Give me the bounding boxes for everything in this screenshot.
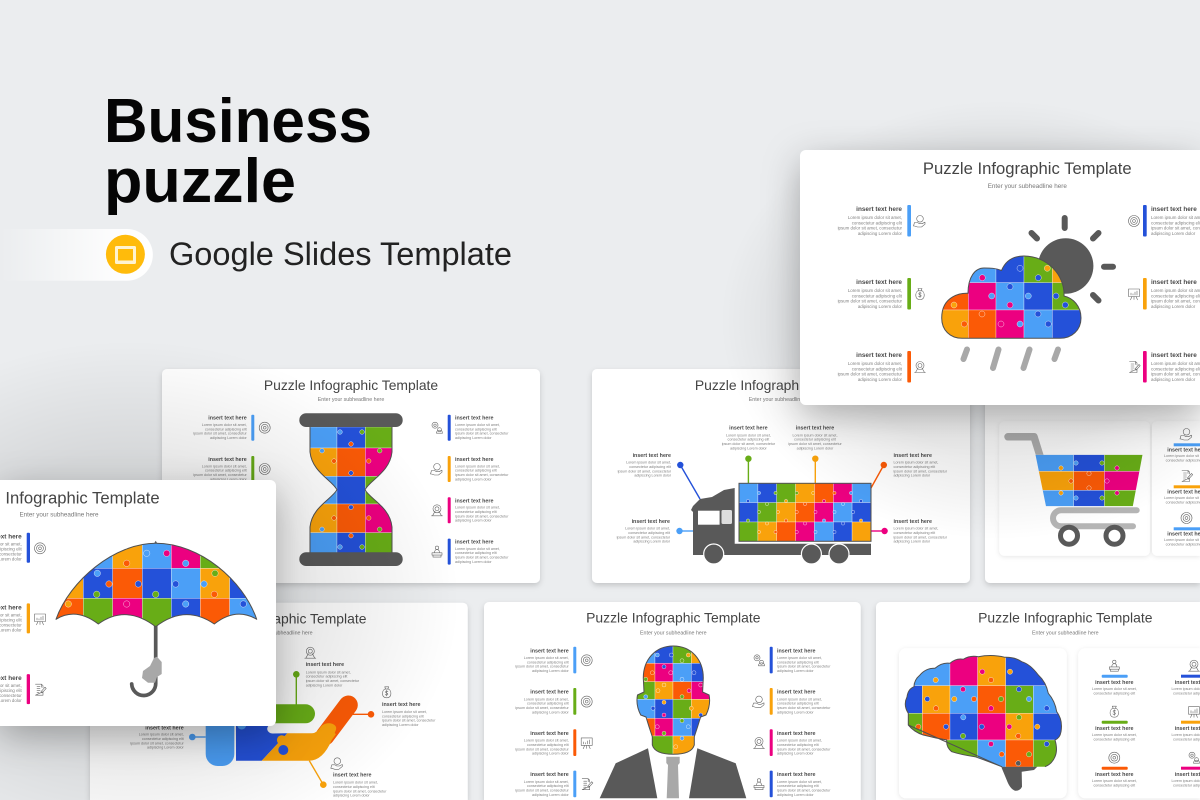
text block: hand top: Lorem ipsum dolor sit amet, bbox=[306, 670, 351, 674]
text block: head left 4: ipsum dolor sit amet, consectetur bbox=[515, 789, 569, 793]
icon: gear target bbox=[1128, 216, 1140, 226]
subheading: umbrella slide: Enter your subheadline here bbox=[19, 512, 99, 519]
text block: hand left: Lorem ipsum dolor sit amet, bbox=[139, 733, 184, 737]
text block: head left 1: consectetur adipiscing elit bbox=[527, 660, 569, 664]
text block: hand top: adipiscing Lorem dolor bbox=[306, 683, 343, 687]
connectors and dots bbox=[676, 456, 888, 534]
text block: cloud left 3: adipiscing Lorem dolor bbox=[858, 377, 903, 382]
text block: right 2: Lorem ipsum dolor sit amet, bbox=[455, 464, 500, 468]
list item: brain column 2 row 3 bbox=[1172, 752, 1200, 787]
list item: brain column 2 row 2 bbox=[1172, 707, 1200, 741]
text block: top centre 2: Lorem ipsum dolor sit amet, bbox=[793, 433, 837, 437]
icon: board bbox=[34, 614, 46, 625]
text block: right bottom: Lorem ipsum dolor sit amet, bbox=[894, 527, 938, 531]
text block: cloud right 3: adipiscing Lorem dolor bbox=[1151, 377, 1196, 382]
text block: cloud left 1: ipsum dolor sit amet, consectetur bbox=[838, 226, 903, 231]
icon: target bbox=[259, 422, 270, 433]
text block: left top: consectetur adipiscing elit bbox=[629, 465, 671, 469]
text block: cloud left 2: adipiscing Lorem dolor bbox=[858, 304, 903, 309]
text block: right bottom: consectetur adipiscing elit bbox=[894, 531, 935, 535]
text block: right 2: consectetur adipiscing elit bbox=[455, 469, 497, 473]
subheading: hand slide: Enter your subheadline here bbox=[246, 630, 313, 636]
subtitle: Google Slides Template bbox=[169, 236, 512, 272]
text block: left 1: adipiscing Lorem dolor bbox=[210, 436, 247, 440]
panel: hourglass slide bbox=[162, 369, 540, 583]
text block: right top: adipiscing Lorem dolor bbox=[894, 474, 931, 478]
text block: hand right bbox=[382, 687, 436, 727]
text block: umbrella left 2 bbox=[0, 603, 30, 633]
icon: document bbox=[582, 779, 593, 790]
text block: umbrella left 1 bbox=[0, 533, 30, 563]
text block: left 2: adipiscing Lorem dolor bbox=[210, 477, 247, 481]
text block: head right 1: ipsum dolor sit amet, consectetur bbox=[777, 665, 831, 669]
chart: hand puzzle bbox=[206, 704, 348, 766]
text block: hand left: adipiscing Lorem dolor bbox=[147, 746, 184, 750]
text block: head left 2: adipiscing Lorem dolor bbox=[532, 710, 569, 714]
text block: head right 2 bbox=[770, 688, 831, 715]
subheading: brain slide: Enter your subheadline here bbox=[1032, 630, 1099, 636]
text block: hand top: ipsum dolor sit amet, consectetur bbox=[306, 679, 360, 683]
text block: cloud left 2: ipsum dolor sit amet, consectetur bbox=[838, 299, 903, 304]
text block: top centre 2: insert text here bbox=[796, 426, 834, 432]
list item: brain column 1 row 2: Lorem ipsum dolor sit amet, bbox=[1092, 733, 1137, 737]
text block: hand right: ipsum dolor sit amet, consectetur bbox=[382, 719, 436, 723]
text block: head left 4: Lorem ipsum dolor sit amet, bbox=[524, 780, 569, 784]
text block: left 1: Lorem ipsum dolor sit amet, bbox=[202, 423, 247, 427]
text block: cloud right 2: adipiscing Lorem dolor bbox=[1151, 304, 1196, 309]
panel: brain text card bbox=[1078, 648, 1200, 798]
list item: brain column 1 row 3 bbox=[1092, 752, 1137, 787]
text block: right top: ipsum dolor sit amet, consectetur bbox=[894, 469, 948, 473]
text block: head right 2: insert text here bbox=[777, 690, 815, 696]
text block: cloud right 1: insert text here bbox=[1151, 206, 1197, 213]
text block: left top: ipsum dolor sit amet, consectetur bbox=[618, 469, 672, 473]
text block: cloud left 3: insert text here bbox=[856, 352, 902, 359]
text block: cloud left 1: Lorem ipsum dolor sit amet, bbox=[848, 215, 902, 220]
heading: brain slide: Puzzle Infographic Template bbox=[978, 610, 1153, 626]
text block: head left 3: ipsum dolor sit amet, consectetur bbox=[515, 747, 569, 751]
text block: head right 3: consectetur adipiscing elit bbox=[777, 743, 819, 747]
icon: document bbox=[1130, 362, 1140, 372]
list item: brain column 1 row 1: Lorem ipsum dolor sit amet, bbox=[1092, 687, 1137, 691]
text block: head right 3: insert text here bbox=[777, 731, 815, 737]
panel: brain illustration card bbox=[899, 648, 1067, 798]
text block: right 1 bbox=[448, 415, 509, 441]
heading: truck slide: Puzzle Infographic Template bbox=[695, 377, 869, 393]
chart: cloud puzzle bbox=[938, 250, 1082, 340]
panel: hand slide bbox=[90, 603, 468, 800]
text block: cloud left 2: insert text here bbox=[856, 279, 902, 286]
text block: head right 3: ipsum dolor sit amet, consectetur bbox=[777, 747, 831, 751]
text block: head left 3: Lorem ipsum dolor sit amet, bbox=[524, 739, 569, 743]
text block: cloud left 1: adipiscing Lorem dolor bbox=[858, 231, 903, 236]
text block: right 3: Lorem ipsum dolor sit amet, bbox=[455, 506, 500, 510]
text block: cloud left 3: ipsum dolor sit amet, consectetur bbox=[838, 372, 903, 377]
icon: person bbox=[754, 779, 764, 790]
list item: brain column 1 row 2: consectetur adipiscing elit bbox=[1093, 737, 1135, 741]
subheading: hourglass slide: Enter your subheadline here bbox=[318, 397, 384, 403]
icon: document bbox=[36, 684, 46, 695]
icon: money hand bbox=[914, 216, 925, 227]
list item: brain column 1 row 3: consectetur adipiscing elit bbox=[1093, 783, 1135, 787]
text block: left 1: ipsum dolor sit amet, consectetur bbox=[193, 432, 247, 436]
text block: cloud right 1: adipiscing Lorem dolor bbox=[1151, 231, 1196, 236]
text block: cloud left 2 bbox=[838, 278, 911, 310]
heading: hourglass slide: Puzzle Infographic Template bbox=[264, 377, 438, 393]
text block: head right 4: adipiscing Lorem dolor bbox=[777, 793, 814, 797]
text block: right bottom: ipsum dolor sit amet, consectetur bbox=[894, 535, 948, 539]
text block: top centre 1: insert text here bbox=[729, 426, 768, 432]
icon: gears bbox=[754, 655, 764, 666]
text block: left 2: Lorem ipsum dolor sit amet, bbox=[202, 464, 247, 468]
text block: cloud right 3: insert text here bbox=[1151, 352, 1197, 359]
text block: cloud left 2: consectetur adipiscing elit bbox=[852, 293, 903, 298]
text block: top centre 1: ipsum dolor sit amet, consectetur bbox=[722, 442, 776, 446]
illustration: brain stem bbox=[1001, 764, 1040, 791]
icon: gear target bbox=[34, 543, 46, 554]
text block: head right 2: ipsum dolor sit amet, consectetur bbox=[777, 706, 831, 710]
title bbox=[104, 87, 372, 216]
text block: top centre 1: adipiscing Lorem dolor bbox=[730, 446, 767, 450]
text block: left bottom: adipiscing Lorem dolor bbox=[633, 540, 671, 544]
text block: left top: Lorem ipsum dolor sit amet, bbox=[626, 461, 671, 465]
illustration: truck body bbox=[691, 488, 871, 564]
illustration: rain bbox=[964, 350, 1058, 368]
text block: right 3: consectetur adipiscing elit bbox=[455, 510, 497, 514]
text block: head left 4 bbox=[515, 771, 576, 797]
icon: gears bbox=[432, 422, 442, 433]
icon: Google Slides bbox=[106, 235, 145, 274]
text block: head right 1 bbox=[770, 647, 831, 673]
list item: brain column 1 row 1: consectetur adipiscing elit bbox=[1093, 691, 1135, 695]
text block: right 3 bbox=[448, 497, 509, 523]
text block: right 4: adipiscing Lorem dolor bbox=[455, 560, 492, 564]
text block: hand top: consectetur adipiscing elit bbox=[306, 675, 347, 679]
text block: head left 2: insert text here bbox=[530, 690, 569, 696]
illustration: cart frame and wheels bbox=[1008, 437, 1137, 544]
icon: gear target bbox=[581, 696, 592, 707]
text block: right 1: consectetur adipiscing elit bbox=[455, 427, 497, 431]
text block: top centre 1: Lorem ipsum dolor sit amet, bbox=[726, 433, 771, 437]
text block: top centre 2: adipiscing Lorem dolor bbox=[797, 446, 834, 450]
panel: truck slide bbox=[592, 369, 970, 583]
text block: right bottom: adipiscing Lorem dolor bbox=[894, 540, 931, 544]
text block: cloud right 3 bbox=[1143, 351, 1200, 382]
list item: brain column 1 row 1 bbox=[1092, 660, 1137, 695]
text block: right 3: ipsum dolor sit amet, consectetur bbox=[455, 514, 509, 518]
subtitle badge with Google Slides icon bbox=[0, 229, 153, 281]
text block: hand right: adipiscing Lorem dolor bbox=[382, 723, 419, 727]
text block: right 4: Lorem ipsum dolor sit amet, bbox=[455, 547, 500, 551]
text block: cloud left 3: consectetur adipiscing elit bbox=[852, 366, 903, 371]
text block: right 1: adipiscing Lorem dolor bbox=[455, 436, 492, 440]
list item: brain column 1 row 2: insert text here bbox=[1095, 726, 1134, 732]
text block: head right 3: Lorem ipsum dolor sit amet, bbox=[777, 739, 822, 743]
text block: right 2: ipsum dolor sit amet, consectetur bbox=[455, 473, 509, 477]
text block: right 3: insert text here bbox=[455, 498, 493, 504]
text block: top centre 2: consectetur adipiscing elit bbox=[794, 438, 836, 442]
text block: hand left: insert text here bbox=[145, 725, 184, 731]
text block: head right 2: consectetur adipiscing elit bbox=[777, 702, 819, 706]
panel: cart illustration card bbox=[999, 421, 1150, 556]
list item: brain column 2 row 1 bbox=[1172, 660, 1200, 695]
text block: head left 3: consectetur adipiscing elit bbox=[527, 743, 569, 747]
text block: top centre 1: consectetur adipiscing elit bbox=[728, 438, 769, 442]
text block: cloud left 1: insert text here bbox=[856, 206, 902, 213]
text block: head left 2: consectetur adipiscing elit bbox=[527, 702, 569, 706]
text block: head right 1: consectetur adipiscing elit bbox=[777, 660, 819, 664]
text block: cloud right 1 bbox=[1143, 205, 1200, 236]
text block: head right 4: Lorem ipsum dolor sit amet, bbox=[777, 780, 822, 784]
text block: head left 2: ipsum dolor sit amet, consectetur bbox=[515, 706, 569, 710]
icon: money bag bbox=[916, 288, 924, 300]
list item: brain column 1 row 3: Lorem ipsum dolor sit amet, bbox=[1092, 779, 1137, 783]
text block: head left 2 bbox=[515, 688, 576, 715]
panel: umbrella slide bbox=[0, 480, 276, 726]
subheading: cloud slide: Enter your subheadline here bbox=[988, 183, 1067, 190]
illustration: umbrella handle and hand bbox=[132, 625, 162, 696]
list item: brain column 1 row 1: insert text here bbox=[1095, 680, 1134, 686]
text block: cloud left 3: Lorem ipsum dolor sit amet, bbox=[848, 361, 902, 366]
text block: head right 4: consectetur adipiscing elit bbox=[777, 784, 819, 788]
list item: cart 1 bbox=[1164, 428, 1200, 462]
text block: cloud right 3: consectetur adipiscing elit bbox=[1151, 366, 1200, 371]
text block: hand bottom bbox=[331, 758, 387, 798]
illustration: sun bbox=[1032, 218, 1113, 300]
text block: left 2: consectetur adipiscing elit bbox=[205, 469, 247, 473]
text block: hand top: insert text here bbox=[306, 662, 344, 668]
text block: hand left: ipsum dolor sit amet, consectetur bbox=[130, 741, 184, 745]
text block: right 4: consectetur adipiscing elit bbox=[455, 551, 497, 555]
chart: cart basket puzzle bbox=[1030, 455, 1144, 506]
list item: cart 3 bbox=[1164, 512, 1200, 546]
text block: head left 1: adipiscing Lorem dolor bbox=[532, 669, 569, 673]
text block: head left 1: ipsum dolor sit amet, consectetur bbox=[515, 665, 569, 669]
text block: head left 3 bbox=[515, 729, 576, 756]
icon: board bbox=[581, 738, 592, 749]
icon: money hand bbox=[752, 696, 764, 708]
chart: head puzzle bbox=[636, 646, 710, 755]
text block: hand bottom: insert text here bbox=[333, 773, 371, 779]
text block: left 2 bbox=[193, 456, 254, 482]
text block: head left 3: insert text here bbox=[530, 731, 569, 737]
subheading: truck slide: Enter your subheadline here bbox=[749, 397, 815, 403]
text block: head left 3: adipiscing Lorem dolor bbox=[532, 752, 569, 756]
title: puzzle bbox=[104, 147, 296, 216]
heading: head slide: Puzzle Infographic Template bbox=[586, 610, 761, 626]
illustration: suit and tie bbox=[600, 748, 746, 798]
text block: right 2: adipiscing Lorem dolor bbox=[455, 477, 492, 481]
text block: cloud left 1: consectetur adipiscing elit bbox=[852, 220, 903, 225]
text block: left bottom: insert text here bbox=[632, 519, 670, 525]
text block: left 1: insert text here bbox=[208, 416, 247, 422]
text block: cloud left 2: Lorem ipsum dolor sit amet, bbox=[848, 288, 902, 293]
text block: umbrella left 3 bbox=[0, 674, 30, 704]
text block: left 2: insert text here bbox=[208, 457, 247, 463]
text block: left top: adipiscing Lorem dolor bbox=[634, 474, 672, 478]
text block: left bottom: ipsum dolor sit amet, consectetur bbox=[617, 535, 671, 539]
text block: top centre 2: ipsum dolor sit amet, consectetur bbox=[788, 442, 842, 446]
text block: head right 1: Lorem ipsum dolor sit amet, bbox=[777, 656, 822, 660]
text block: left 1 bbox=[193, 415, 254, 441]
text block: head left 4: consectetur adipiscing elit bbox=[527, 784, 569, 788]
text block: right 2 bbox=[448, 456, 509, 482]
chart: umbrella canopy puzzle bbox=[50, 540, 262, 630]
text block: right 2: insert text here bbox=[455, 457, 493, 463]
connectors and dots bbox=[189, 671, 374, 788]
text block: hand right: insert text here bbox=[382, 702, 420, 708]
heading: hand slide: Puzzle Infographic Template bbox=[192, 610, 367, 626]
text block: head right 2: adipiscing Lorem dolor bbox=[777, 710, 814, 714]
text block: left top: insert text here bbox=[633, 453, 671, 459]
text block: head left 4: insert text here bbox=[530, 772, 569, 778]
text block: left bottom: consectetur adipiscing elit bbox=[628, 531, 670, 535]
icon: ferris bbox=[432, 505, 442, 516]
panel: cloud slide bbox=[800, 150, 1200, 405]
text block: right 1: Lorem ipsum dolor sit amet, bbox=[455, 423, 500, 427]
text block: head left 2: Lorem ipsum dolor sit amet, bbox=[524, 697, 569, 701]
text block: left bottom: Lorem ipsum dolor sit amet, bbox=[625, 527, 670, 531]
list item: brain column 1 row 3: insert text here bbox=[1095, 772, 1134, 778]
text block: right 4: ipsum dolor sit amet, consectetur bbox=[455, 556, 509, 560]
chart: hourglass puzzle bbox=[299, 413, 403, 566]
text block: cloud right 2: consectetur adipiscing elit bbox=[1151, 293, 1200, 298]
text block: head right 1: adipiscing Lorem dolor bbox=[777, 669, 814, 673]
subheading: head slide: Enter your subheadline here bbox=[640, 630, 707, 636]
text block: right 4: insert text here bbox=[455, 540, 493, 546]
text block: head right 3: adipiscing Lorem dolor bbox=[777, 752, 814, 756]
text block: head left 1: Lorem ipsum dolor sit amet, bbox=[524, 656, 569, 660]
text block: head left 4: adipiscing Lorem dolor bbox=[532, 793, 569, 797]
heading: cloud slide: Puzzle Infographic Template bbox=[923, 159, 1132, 178]
icon: ferris bbox=[754, 737, 764, 748]
text block: left 2: ipsum dolor sit amet, consectetur bbox=[193, 473, 247, 477]
panel: cart text card bbox=[1152, 421, 1200, 556]
text block: hand left: consectetur adipiscing elit bbox=[142, 737, 184, 741]
text block: hand bottom: ipsum dolor sit amet, consectetur bbox=[333, 789, 387, 793]
text block: right 3: adipiscing Lorem dolor bbox=[455, 519, 492, 523]
text block: left 1: consectetur adipiscing elit bbox=[205, 427, 247, 431]
text block: head left 1: insert text here bbox=[530, 648, 569, 654]
text block: right top: Lorem ipsum dolor sit amet, bbox=[894, 461, 938, 465]
text block: hand right: consectetur adipiscing elit bbox=[382, 714, 424, 718]
icon: ferris bbox=[914, 362, 926, 372]
text block: hand bottom: Lorem ipsum dolor sit amet, bbox=[333, 781, 378, 785]
panel: head slide bbox=[484, 602, 861, 800]
chart: truck container puzzle bbox=[739, 483, 871, 541]
text block: head right 1: insert text here bbox=[777, 648, 815, 654]
text block: cloud left 1 bbox=[838, 205, 911, 236]
icon: money hand bbox=[430, 464, 442, 475]
chart: brain puzzle bbox=[900, 650, 1066, 767]
text block: head right 4 bbox=[770, 771, 831, 797]
text block: hand bottom: adipiscing Lorem dolor bbox=[333, 794, 370, 798]
text block: right 1: ipsum dolor sit amet, consectetur bbox=[455, 432, 509, 436]
list item: brain column 1 row 2 bbox=[1092, 706, 1137, 741]
text block: cloud right 2 bbox=[1143, 278, 1200, 310]
icon: board bbox=[1128, 289, 1140, 300]
panel: shopping cart slide bbox=[983, 405, 1200, 588]
text block: head left 1 bbox=[515, 647, 576, 673]
text block: right bottom: insert text here bbox=[894, 519, 932, 525]
text block: cloud left 3 bbox=[838, 351, 911, 382]
title: Business bbox=[104, 87, 372, 156]
panel: brain slide bbox=[876, 602, 1200, 800]
text block: cloud right 1: consectetur adipiscing elit bbox=[1151, 220, 1200, 225]
text block: head right 4: insert text here bbox=[777, 772, 815, 778]
icon: gear target bbox=[259, 464, 270, 474]
text block: hand right: Lorem ipsum dolor sit amet, bbox=[382, 710, 427, 714]
text block: hand top bbox=[305, 647, 360, 687]
text block: hand bottom: consectetur adipiscing elit bbox=[333, 785, 375, 789]
text block: head right 4: ipsum dolor sit amet, consectetur bbox=[777, 789, 831, 793]
list item: cart 2 bbox=[1164, 470, 1200, 504]
icon: target bbox=[581, 655, 592, 666]
text block: head right 3 bbox=[770, 729, 831, 756]
text block: right top: insert text here bbox=[894, 453, 932, 459]
text block: right 4 bbox=[448, 539, 509, 565]
icon: person bbox=[432, 546, 442, 557]
text block: cloud right 2: insert text here bbox=[1151, 279, 1197, 286]
text block: right top: consectetur adipiscing elit bbox=[894, 465, 935, 469]
text block: head right 2: Lorem ipsum dolor sit amet, bbox=[777, 697, 822, 701]
text block: right 1: insert text here bbox=[455, 416, 493, 422]
